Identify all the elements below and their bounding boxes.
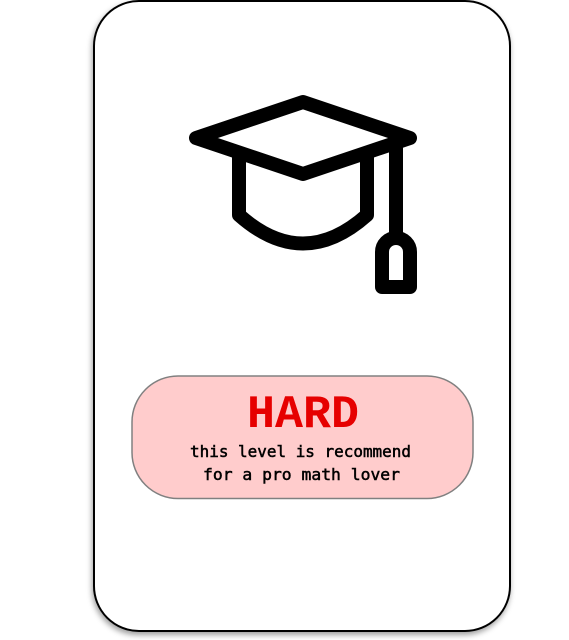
- icon part: tassel cord: [389, 142, 403, 238]
- icon: graduation cap: [196, 102, 410, 287]
- icon part: mortarboard: [196, 102, 410, 174]
- panel: difficulty badge: [132, 376, 473, 498]
- badge background: [132, 376, 473, 498]
- heading: HARD: HARD: [247, 389, 359, 441]
- panel: level card: [93, 0, 511, 632]
- icon part: tassel: [382, 238, 410, 287]
- text: description line 1: this level is recommend: [190, 442, 411, 461]
- text: description line 2: for a pro math lover: [203, 465, 400, 484]
- icon part: cap body: [239, 150, 367, 244]
